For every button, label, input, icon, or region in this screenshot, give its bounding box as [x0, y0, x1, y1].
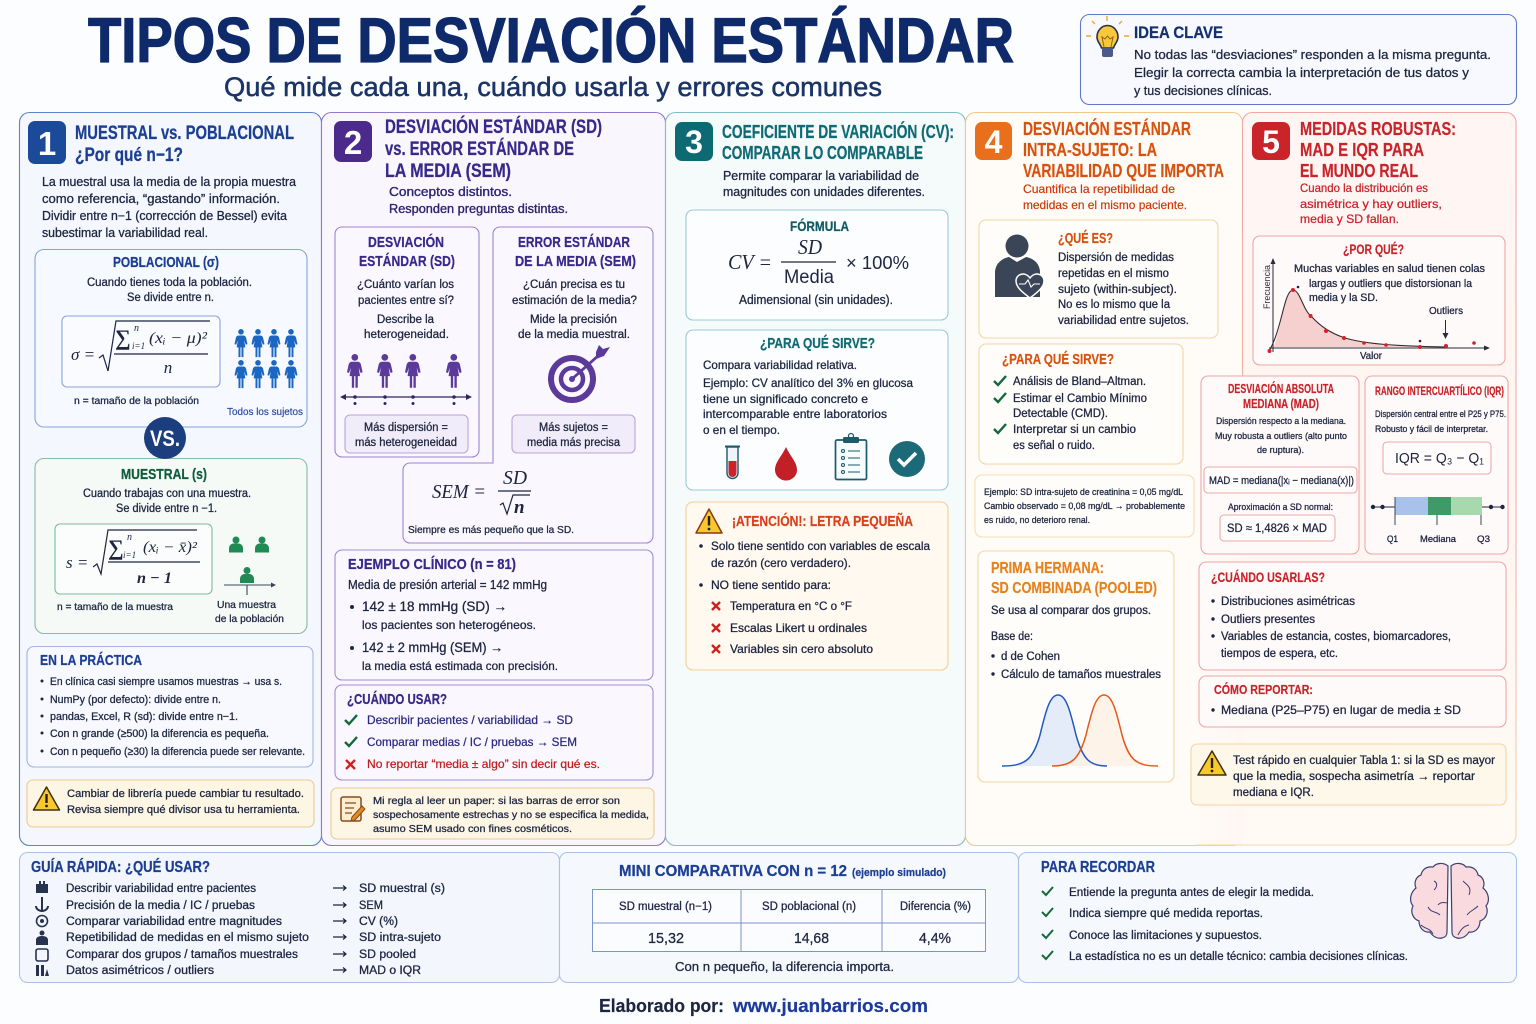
panel: guía rápida: [20, 852, 560, 982]
card: qué es: variabilidad entre sujetos.: [1058, 315, 1189, 327]
icon: dispersed people on axis: [340, 354, 472, 405]
formula: SEM: SEM =: [432, 481, 486, 503]
badge 3: 3: [685, 124, 703, 160]
card: ejemplo creatinina: Cambio observado = 0,08 mg/dL → probablemente: [984, 501, 1185, 512]
card: para qué sirve: Ejemplo: CV analítico del 3% en glucosa: [703, 376, 913, 390]
intro text: La muestral usa la media de la propia muestra: [42, 175, 296, 189]
panel 5: medidas robustas: [1191, 112, 1516, 845]
icons: guide list: [36, 881, 49, 976]
card: cuándo usar: ¿CUÁNDO USAR?: [347, 691, 447, 708]
intro: Cuando la distribución es: [1300, 181, 1428, 195]
card: fórmula: CV =: [728, 250, 772, 274]
formula: s: [55, 524, 212, 594]
badge 1: [28, 121, 66, 164]
panel: guía rápida: GUÍA RÁPIDA: ¿QUÉ USAR?: [31, 859, 210, 876]
chart: skewed distribution: [1262, 258, 1490, 362]
intro: Conceptos distintos.: [389, 185, 512, 199]
card: ejemplo clínico: Media de presión arterial = 142 mmHg: [348, 578, 547, 592]
card: por qué: Muchas variables en salud tienen colas: [1294, 263, 1485, 275]
heading: MUESTRAL vs. POBLACIONAL: [75, 123, 294, 144]
card: para qué sirve: intercomparable entre laboratorios: [703, 407, 887, 421]
icon: test tube: [725, 446, 740, 478]
callout: idea clave: y tus decisiones clínicas.: [1134, 83, 1272, 98]
card: atención: [686, 502, 948, 670]
card: SD pooled: Base de:: [991, 631, 1033, 643]
card: cuándo usarlas: [1199, 562, 1506, 670]
intro: [389, 185, 568, 216]
card: para qué sirve: [979, 344, 1183, 464]
formula: s: i=1: [123, 550, 136, 560]
intro: media y SD fallan.: [1300, 212, 1399, 226]
panel: guía rápida: CV (%): [359, 916, 398, 928]
intro: [1300, 181, 1442, 226]
card: para qué sirve: Detectable (CMD).: [1013, 408, 1108, 420]
card: ejemplo clínico: 142 ± 2 mmHg (SEM) →: [362, 640, 503, 655]
card: fórmula: Media: [784, 267, 834, 288]
card: atención: Solo tiene sentido con variables de escala: [711, 539, 930, 553]
card: MAD: [1201, 376, 1359, 554]
card: muestral: [35, 458, 307, 634]
intro: Permite comparar la variabilidad de: [723, 169, 919, 183]
panel: guía rápida: Describir variabilidad entre pacientes: [66, 883, 256, 895]
card: fórmula: SD: [798, 235, 822, 259]
heading: [722, 121, 954, 163]
card: qué es: ¿QUÉ ES?: [1058, 230, 1113, 247]
formula: sigma: ∑: [115, 325, 131, 350]
card: para qué sirve: [686, 330, 948, 490]
icon: population people: [234, 329, 297, 388]
intro text: como referencia, “gastando” información.: [42, 192, 280, 206]
card: SD: heterogeneidad.: [364, 329, 449, 341]
icon: brain: [1411, 863, 1488, 938]
card: para qué sirve: o en el tiempo.: [703, 423, 780, 437]
card: fórmula: Adimensional (sin unidades).: [739, 293, 893, 307]
card: SD: ESTÁNDAR (SD): [359, 253, 455, 270]
card: MAD: DESVIACIÓN ABSOLUTA: [1228, 381, 1334, 396]
card: qué es: No es lo mismo que la: [1058, 299, 1171, 311]
table: 15,32: [648, 931, 684, 947]
list of reminders: Indica siempre qué medida reportas.: [1069, 908, 1263, 920]
card: SD pooled: SD COMBINADA (POOLED): [991, 580, 1157, 597]
card: en la práctica: EN LA PRÁCTICA: [40, 652, 142, 669]
card: cómo reportar: [1199, 676, 1506, 727]
card: fórmula: [686, 210, 948, 320]
card: SEM: estimación de la media?: [512, 295, 637, 307]
card: cuándo usar: [335, 685, 653, 780]
card: SD pooled: Cálculo de tamaños muestrales: [1001, 669, 1161, 681]
card: SD: pacientes entre sí?: [358, 295, 454, 307]
card: poblacional: Cuando tienes toda la población.: [87, 277, 252, 289]
callout: idea clave: [1080, 14, 1516, 104]
panel: mini comparativa: [560, 852, 1018, 982]
callout: mi regla: [331, 788, 654, 839]
panel 2: SD vs SEM: [322, 112, 666, 846]
card: para qué sirve: ¿PARA QUÉ SIRVE?: [1002, 351, 1114, 368]
panel: guía rápida: SEM: [359, 900, 383, 912]
formula: sigma: (xᵢ − μ)²: [149, 330, 208, 347]
card: ejemplo clínico: [335, 550, 653, 680]
card: muestral: de la población: [215, 613, 284, 625]
card: IQR: Dispersión central entre el P25 y P75.: [1375, 409, 1506, 419]
heading: COMPARAR LO COMPARABLE: [722, 143, 923, 163]
heading: MAD E IQR PARA: [1300, 140, 1424, 160]
title: TIPOS DE DESVIACIÓN ESTÁNDAR: [88, 6, 1014, 76]
icon: warning: [34, 787, 60, 810]
table: SD poblacional (n): [762, 901, 856, 913]
icon: person with heart: [995, 234, 1044, 298]
card: fórmula: × 100%: [846, 253, 909, 273]
intro: asimétrica y hay outliers,: [1300, 197, 1442, 211]
card: cómo reportar: CÓMO REPORTAR:: [1214, 682, 1313, 697]
panel: guía rápida: SD muestral (s): [359, 883, 445, 895]
panel 3: coeficiente de variación: [666, 112, 966, 846]
heading: [385, 116, 602, 182]
badge 1: 1: [38, 125, 56, 162]
heading: INTRA-SUJETO: LA: [1023, 140, 1157, 160]
icon: VS circle: [144, 417, 186, 459]
intro: [723, 169, 925, 199]
callout: idea clave: IDEA CLAVE: [1134, 23, 1223, 42]
callout: test rápido: mediana e IQR.: [1233, 787, 1314, 799]
card: cuándo usar: Describir pacientes / variabilidad → SD: [367, 713, 573, 727]
card: atención: de razón (cero verdadero).: [711, 556, 851, 570]
intro: Cuantifica la repetibilidad de: [1023, 182, 1175, 196]
panel 1: muestral vs poblacional: [20, 112, 322, 846]
panel: para recordar: [1018, 852, 1516, 982]
heading: DESVIACIÓN ESTÁNDAR (SD): [385, 116, 602, 138]
icon: note and pencil: [341, 797, 365, 821]
intro text: Dividir entre n−1 (corrección de Bessel) evita: [42, 209, 287, 223]
list of reminders: [1042, 887, 1408, 963]
chart: overlapping normal curves: [1002, 695, 1158, 766]
formula: s: n − 1: [137, 570, 172, 587]
chart: boxplot: [1371, 497, 1505, 545]
panel: guía rápida: Comparar dos grupos / tamaños muestrales: [66, 949, 298, 961]
callout: librería: Cambiar de librería puede cambiar tu resultado.: [67, 788, 304, 800]
callout: idea clave: Elegir la correcta cambia la interpretación de tus datos y: [1134, 65, 1470, 80]
list of reminders: La estadística no es un detalle técnico: cambia decisiones clínicas.: [1069, 951, 1408, 963]
card: atención: Variables sin cero absoluto: [730, 642, 873, 656]
badge 5: [1252, 122, 1290, 160]
card: por qué: [1253, 236, 1505, 365]
callout: test rápido: [1191, 744, 1506, 805]
intro: magnitudes con unidades diferentes.: [723, 185, 925, 199]
footer credit: www.juanbarrios.com: [732, 995, 928, 1016]
card: IQR: [1365, 376, 1508, 554]
card: en la práctica: [27, 646, 313, 767]
callout: test rápido: que la media, sospecha asimetría → reportar: [1233, 771, 1475, 783]
card: para qué sirve: tiene un significado concreto e: [703, 392, 868, 406]
card: muestral: MUESTRAL (s): [121, 466, 207, 483]
callout: mi regla: sospechosamente estrechas y no se especifica la medida,: [373, 809, 649, 821]
card: SD: ¿Cuánto varían los: [357, 279, 454, 291]
intro: Responden preguntas distintas.: [389, 202, 568, 216]
card: poblacional: POBLACIONAL (σ): [113, 254, 219, 271]
card: SEM: ERROR ESTÁNDAR: [518, 234, 630, 251]
card: SEM: ¿Cuán precisa es tu: [523, 279, 625, 291]
card: cómo reportar: Mediana (P25–P75) en lugar de media ± SD: [1221, 703, 1461, 717]
card: SD: Más dispersión =: [364, 422, 448, 434]
card: cuándo usarlas: tiempos de espera, etc.: [1221, 648, 1338, 660]
icon: sample people: [224, 536, 276, 595]
card: qué es: repetidas en el mismo: [1058, 268, 1169, 280]
panel: guía rápida: Precisión de la media / IC / pruebas: [66, 900, 255, 912]
card: ejemplo clínico: EJEMPLO CLÍNICO (n = 81): [348, 556, 516, 573]
card: cuándo usar: No reportar “media ± algo” sin decir qué es.: [367, 757, 600, 771]
card: cuándo usar: Comparar medias / IC / pruebas → SEM: [367, 735, 577, 749]
chart: boxplot: Q3: [1477, 534, 1490, 545]
card: qué es: sujeto (within-subject).: [1058, 284, 1177, 296]
heading: MEDIDAS ROBUSTAS:: [1300, 119, 1456, 139]
card: SEM: de la media muestral.: [518, 329, 630, 341]
arrows: [333, 886, 346, 972]
card: SEM: Mide la precisión: [530, 314, 617, 326]
card: SD: DESVIACIÓN: [368, 233, 444, 251]
card: SD pooled: PRIMA HERMANA:: [991, 560, 1104, 577]
card: MAD: Aproximación a SD normal:: [1228, 502, 1333, 513]
card: atención: ¡ATENCIÓN!: LETRA PEQUEÑA: [732, 512, 913, 530]
formula: sigma: n: [164, 358, 172, 377]
card: por qué: largas y outliers que distorsionan la: [1309, 278, 1473, 290]
card: para qué sirve: ¿PARA QUÉ SIRVE?: [760, 335, 875, 352]
card: en la práctica: Con n pequeño (≥30) la diferencia puede ser relevante.: [50, 746, 305, 758]
formula: sigma: σ =: [71, 345, 95, 364]
icon: light bulb: [1086, 16, 1129, 57]
panel: guía rápida: SD intra-sujeto: [359, 932, 441, 944]
card: SD pooled: Se usa al comparar dos grupos.: [991, 605, 1151, 617]
badge 5: 5: [1262, 124, 1280, 160]
card: muestral: Se divide entre n −1.: [116, 503, 217, 515]
heading: VARIABILIDAD QUE IMPORTA: [1023, 161, 1224, 181]
subtitle: Qué mide cada una, cuándo usarla y errores comunes: [224, 72, 882, 102]
formula: SEM: [408, 467, 574, 536]
card: SD: [335, 227, 479, 457]
card: en la práctica: pandas, Excel, R (sd): divide entre n−1.: [50, 711, 238, 723]
card: poblacional: Se divide entre n.: [127, 292, 214, 304]
table: SD muestral (n−1): [619, 901, 712, 913]
formula: sigma: i=1: [132, 341, 145, 351]
card: cuándo usarlas: Variables de estancia, costes, biomarcadores,: [1221, 631, 1451, 643]
table: [592, 889, 986, 952]
card: para qué sirve: Interpretar si un cambio: [1013, 424, 1136, 436]
card: IQR: IQR = Q₃ − Q₁: [1395, 450, 1484, 467]
card: en la práctica: En clínica casi siempre usamos muestras → usa s.: [50, 676, 282, 688]
chart: boxplot: Q1: [1387, 534, 1398, 545]
icon: blood drop: [775, 447, 797, 480]
card: por qué: media y la SD.: [1309, 292, 1378, 304]
badge 4: [975, 122, 1012, 160]
formula: s: s =: [66, 553, 88, 572]
chart: skewed distribution: Outliers: [1429, 306, 1463, 317]
panel 4: intra-sujeto: [966, 112, 1242, 846]
icon: target with arrow: [551, 345, 610, 400]
card: en la práctica: NumPy (por defecto): divide entre n.: [50, 694, 221, 706]
chart: skewed distribution: Valor: [1360, 351, 1383, 362]
table: Diferencia (%): [900, 901, 971, 913]
formula: s: ∑: [108, 535, 124, 560]
heading: [1300, 119, 1456, 181]
intro text: subestimar la variabilidad real.: [42, 226, 208, 240]
card: SEM: Más sujetos =: [539, 422, 608, 434]
icon: clipboard: [836, 434, 866, 480]
callout: librería: [27, 780, 314, 827]
card: qué es: Dispersión de medidas: [1058, 252, 1174, 264]
card: ejemplo creatinina: Ejemplo: SD intra-sujeto de creatinina = 0,05 mg/dL: [984, 487, 1183, 498]
card: poblacional: n = tamaño de la población: [74, 395, 199, 407]
card: SD pooled: d de Cohen: [1001, 651, 1060, 663]
panel: mini comparativa: MINI COMPARATIVA CON n = 12: [619, 863, 847, 880]
card: muestral: Una muestra: [217, 599, 276, 611]
card: en la práctica: Con n grande (≥500) la diferencia es pequeña.: [50, 728, 269, 740]
formula: SEM: n: [514, 497, 525, 518]
card: cuándo usarlas: ¿CUÁNDO USARLAS?: [1211, 570, 1325, 585]
formula: sigma: n: [134, 323, 139, 334]
icon: warning: [1198, 751, 1226, 775]
callout: mi regla: Mi regla al leer un paper: si las barras de error son: [373, 795, 620, 807]
heading: COEFICIENTE DE VARIACIÓN (CV):: [722, 121, 954, 142]
icon: warning: [696, 509, 722, 533]
intro text: [42, 175, 296, 240]
card: SEM: [403, 227, 653, 543]
card: poblacional: Todos los sujetos: [227, 406, 303, 418]
card: cuándo usarlas: Outliers presentes: [1221, 614, 1315, 626]
icon: check circle: [889, 441, 925, 477]
badge 3: [675, 122, 713, 161]
card: MAD: MEDIANA (MAD): [1243, 397, 1319, 411]
footer credit: Elaborado por:: [599, 996, 724, 1016]
card: para qué sirve: Compara variabilidad relativa.: [703, 358, 857, 372]
panel: para recordar: PARA RECORDAR: [1041, 859, 1155, 876]
card: fórmula: FÓRMULA: [790, 217, 849, 234]
heading: vs. ERROR ESTÁNDAR DE: [385, 138, 574, 160]
card: para qué sirve: es señal o ruido.: [1013, 440, 1095, 452]
formula: sigma: [62, 316, 220, 387]
panel: guía rápida: Repetibilidad de medidas en el mismo sujeto: [66, 932, 309, 944]
heading: EL MUNDO REAL: [1300, 161, 1418, 181]
card: SEM: DE LA MEDIA (SEM): [515, 253, 636, 270]
table: 14,68: [794, 931, 829, 947]
badge 2: [334, 121, 372, 162]
panel: guía rápida: MAD o IQR: [359, 965, 421, 977]
card: MAD: de ruptura).: [1257, 445, 1304, 456]
badge 2: 2: [344, 124, 362, 161]
panel: guía rápida: SD pooled: [359, 949, 416, 961]
card: SD: más heterogeneidad: [355, 437, 457, 449]
list of reminders: Entiende la pregunta antes de elegir la medida.: [1069, 887, 1314, 899]
heading: [1023, 118, 1224, 181]
card: por qué: ¿POR QUÉ?: [1343, 242, 1404, 257]
card: qué es: [979, 220, 1218, 338]
heading: DESVIACIÓN ESTÁNDAR: [1023, 118, 1191, 139]
table: 4,4%: [919, 931, 951, 947]
panel: guía rápida: Datos asimétricos / outliers: [66, 965, 214, 977]
card: ejemplo clínico: 142 ± 18 mmHg (SD) →: [362, 599, 507, 614]
card: SD pooled: [978, 551, 1174, 782]
card: SEM: media más precisa: [527, 437, 621, 449]
callout: mi regla: asumo SEM usado con fines cosméticos.: [373, 823, 572, 835]
card: atención: Temperatura en °C o °F: [730, 599, 852, 613]
card: muestral: Cuando trabajas con una muestra.: [83, 488, 251, 500]
panel: mini comparativa: (ejemplo simulado): [852, 867, 946, 879]
intro: [1023, 182, 1187, 212]
badge 4: 4: [985, 124, 1003, 160]
footer credit: [599, 995, 928, 1016]
card: MAD: Muy robusta a outliers (alto punto: [1215, 431, 1347, 442]
card: IQR: Robusto y fácil de interpretar.: [1375, 424, 1488, 434]
formula: SEM: Siempre es más pequeño que la SD.: [408, 524, 574, 536]
formula: s: (xᵢ − x̄)²: [143, 539, 197, 556]
card: MAD: SD ≈ 1,4826 × MAD: [1227, 521, 1327, 535]
intro: medidas en el mismo paciente.: [1023, 198, 1187, 212]
card: cuándo usarlas: Distribuciones asimétricas: [1221, 596, 1355, 608]
list of reminders: Conoce las limitaciones y supuestos.: [1069, 930, 1262, 942]
callout: test rápido: Test rápido en cualquier Tabla 1: si la SD es mayor: [1233, 755, 1495, 767]
card: poblacional: [35, 250, 307, 427]
card: ejemplo clínico: los pacientes son heterogéneos.: [362, 618, 536, 632]
heading: ¿Por qué n−1?: [75, 145, 183, 166]
card: atención: NO tiene sentido para:: [711, 578, 831, 592]
callout: librería: Revisa siempre qué divisor usa tu herramienta.: [67, 804, 300, 816]
panel: mini comparativa: Con n pequeño, la diferencia importa.: [675, 960, 894, 974]
card: para qué sirve: Análisis de Bland–Altman.: [1013, 376, 1146, 388]
icon: VS circle: VS.: [150, 426, 180, 451]
card: ejemplo clínico: la media está estimada con precisión.: [362, 659, 558, 673]
formula: SEM: SD: [503, 467, 528, 489]
formula: s: n: [127, 532, 132, 543]
card: MAD: MAD = mediana(|xᵢ − mediana(x)|): [1209, 475, 1354, 487]
heading: [75, 123, 294, 166]
card: MAD: Dispersión respecto a la mediana.: [1216, 416, 1346, 427]
chart: skewed distribution: Frecuencia: [1262, 264, 1273, 309]
card: SD: Describe la: [377, 314, 435, 326]
card: atención: Escalas Likert u ordinales: [730, 621, 867, 635]
card: muestral: n = tamaño de la muestra: [57, 601, 173, 613]
chart: boxplot: Mediana: [1420, 534, 1457, 545]
card: para qué sirve: Estimar el Cambio Mínimo: [1013, 393, 1147, 405]
card: ejemplo creatinina: [975, 475, 1194, 537]
heading: LA MEDIA (SEM): [385, 161, 511, 182]
callout: idea clave: No todas las “desviaciones” responden a la misma pregunta.: [1134, 47, 1491, 62]
card: ejemplo creatinina: es ruido, no deterioro renal.: [984, 515, 1090, 526]
panel: guía rápida: Comparar variabilidad entre magnitudes: [66, 916, 282, 928]
